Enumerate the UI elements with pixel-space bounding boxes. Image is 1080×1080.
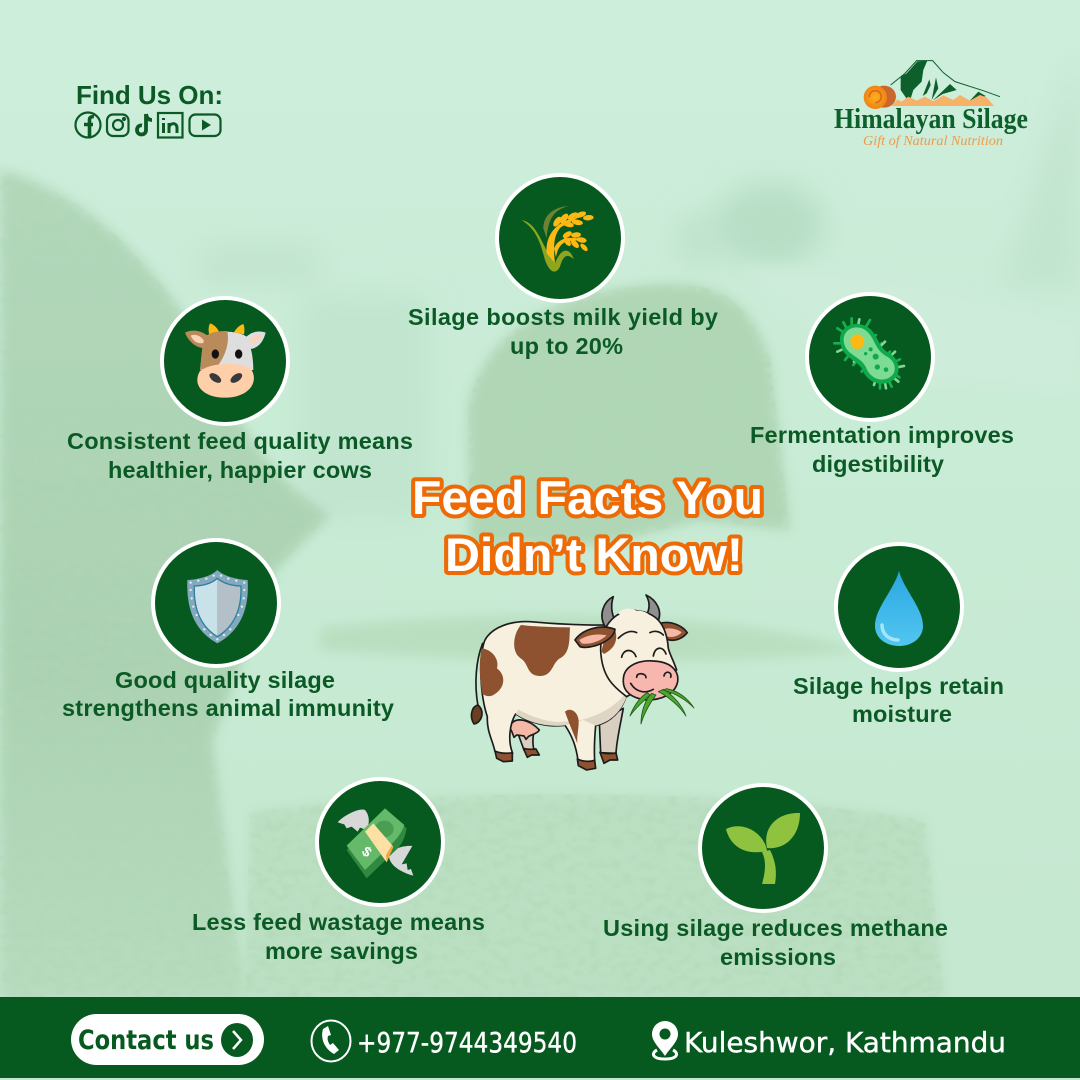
text: moisture: Silage helps retain xyxy=(793,673,1004,699)
fact: digestibility xyxy=(750,294,1014,477)
title xyxy=(412,471,763,581)
near hooves xyxy=(495,751,512,762)
right ear xyxy=(660,622,687,640)
icon: location pin xyxy=(652,1021,678,1059)
icon: cow face xyxy=(162,298,288,424)
far front leg xyxy=(599,708,623,753)
hair tuft xyxy=(618,609,653,626)
text: healthier cows: healthier, happier cows xyxy=(108,457,372,483)
text: milk yield: Silage boosts milk yield by xyxy=(408,304,718,330)
far rear leg xyxy=(517,730,534,750)
fact: savings xyxy=(192,779,485,964)
muzzle xyxy=(623,661,678,700)
icon: water drop xyxy=(836,544,962,670)
text: healthier cows xyxy=(67,428,413,483)
text: savings xyxy=(192,909,485,964)
find us on xyxy=(76,80,223,138)
text: savings: more savings xyxy=(265,938,418,964)
icon: flying money: $ xyxy=(359,843,375,860)
phone number: +977-9744349540 xyxy=(357,1026,577,1059)
horns xyxy=(602,597,618,627)
text: healthier cows: Consistent feed quality means xyxy=(67,428,413,454)
tail xyxy=(476,643,483,706)
heading: find us on: Find Us On: xyxy=(76,80,223,110)
udder xyxy=(509,720,539,739)
cow illustration xyxy=(471,595,694,770)
fact: milk yield xyxy=(408,175,718,359)
head patch xyxy=(602,629,616,654)
text: moisture xyxy=(793,673,1004,727)
head xyxy=(601,610,677,697)
logo: himalayan silage xyxy=(834,61,1028,149)
body spots xyxy=(514,625,570,676)
title: Didn’t Know! xyxy=(445,528,743,581)
text: methane: Using silage reduces methane xyxy=(603,915,948,941)
address: Kuleshwor, Kathmandu xyxy=(684,1026,1006,1059)
icon: flying money xyxy=(317,779,443,905)
fact: moisture xyxy=(793,544,1004,727)
text: savings: Less feed wastage means xyxy=(192,909,485,935)
text: digestibility xyxy=(750,422,1014,477)
contact button: Contact us xyxy=(78,1025,214,1056)
title: Feed Facts You xyxy=(412,471,763,524)
logo name: Himalayan Silage xyxy=(834,104,1028,135)
social icons xyxy=(76,112,220,138)
text: methane: emissions xyxy=(720,944,836,970)
icon: sprout xyxy=(700,785,826,911)
fact: healthier cows xyxy=(67,298,413,483)
icon: bacteria xyxy=(807,294,933,420)
grass xyxy=(630,689,694,724)
text: milk yield: up to 20% xyxy=(510,333,623,359)
text: digestibility: Fermentation improves xyxy=(750,422,1014,448)
fact: immunity xyxy=(62,540,394,721)
text: immunity: strengthens animal immunity xyxy=(62,695,394,721)
logo mark xyxy=(864,61,1000,109)
logo tagline: Gift of Natural Nutrition xyxy=(863,134,1003,149)
text: immunity xyxy=(62,667,394,721)
body xyxy=(481,622,627,762)
text: digestibility: digestibility xyxy=(812,451,944,477)
text: milk yield xyxy=(408,304,718,359)
text: methane xyxy=(603,915,948,970)
contact button xyxy=(71,1014,264,1065)
footer bar xyxy=(0,997,1080,1078)
icon: shield xyxy=(153,540,279,666)
text: moisture: moisture xyxy=(852,701,952,727)
text: immunity: Good quality silage xyxy=(115,667,335,693)
belly shadow xyxy=(516,695,627,726)
icon: phone xyxy=(312,1020,350,1062)
left ear xyxy=(575,627,615,647)
eyes xyxy=(618,631,666,657)
fact: methane xyxy=(603,785,948,970)
icon: rice stalk xyxy=(497,175,623,301)
